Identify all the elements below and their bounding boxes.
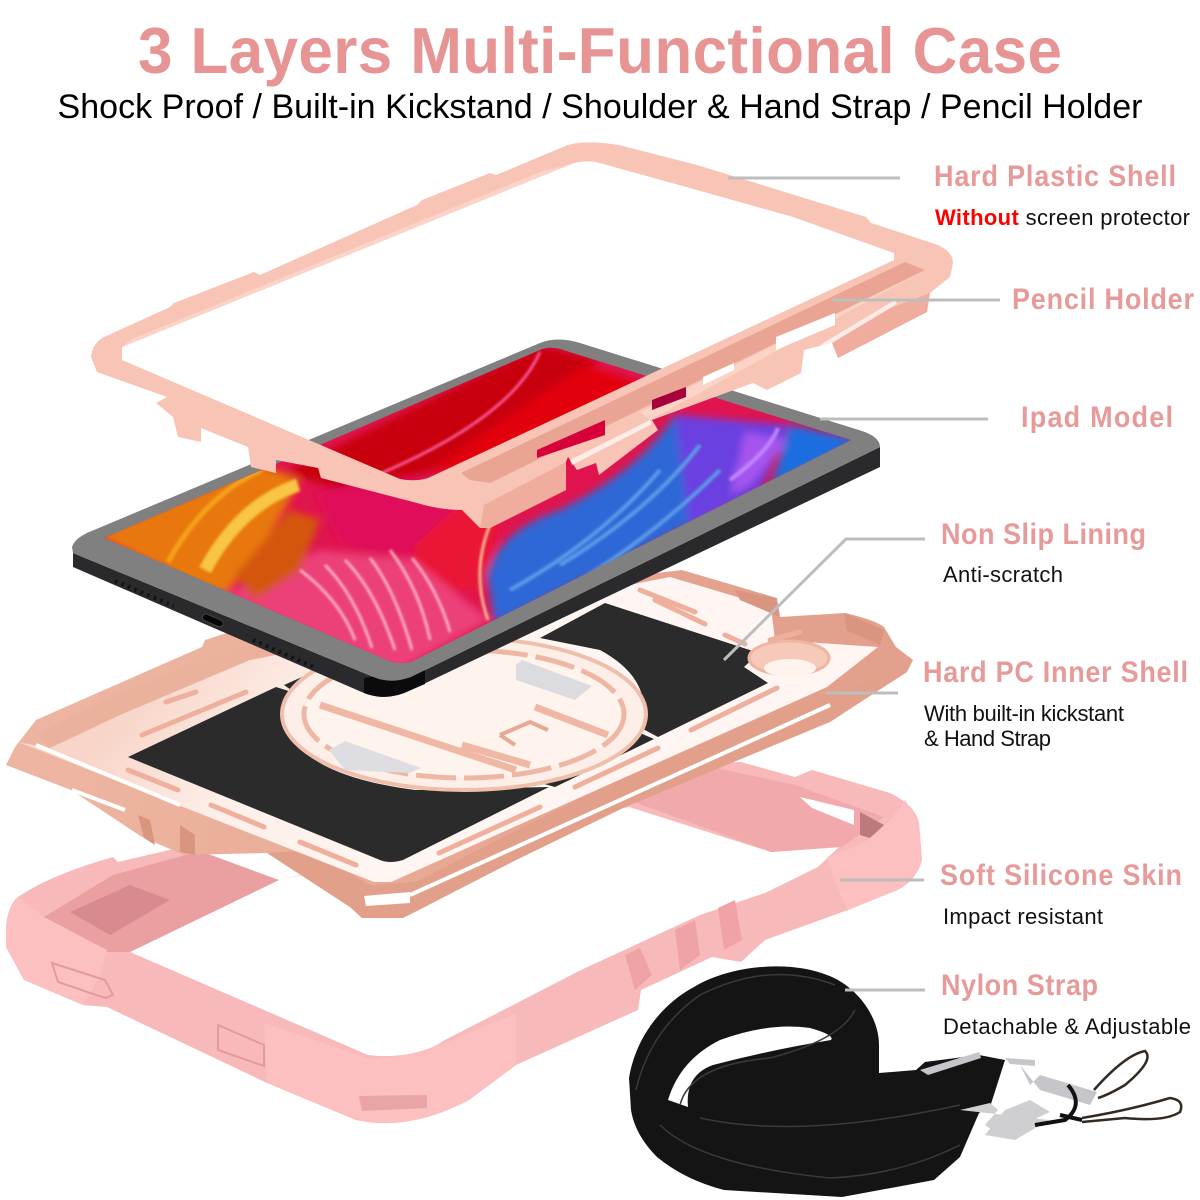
tablet screen	[90, 340, 870, 670]
silicone inner walls	[44, 851, 279, 952]
silicone port covers	[52, 963, 264, 1066]
label: hard pc inner shell: With built-in kickstant	[924, 701, 1124, 726]
metal clip 1	[920, 1052, 1097, 1105]
hard PC inner shell	[6, 570, 913, 918]
title: 3 Layers Multi-Functional Case	[138, 15, 1062, 87]
string loop 1	[1094, 1051, 1148, 1098]
label: non slip lining: Non Slip Lining	[941, 518, 1146, 550]
kickstand hinge	[500, 722, 548, 745]
hand strap clips	[516, 660, 592, 700]
black non slip lining	[128, 603, 768, 862]
subtitle: Shock Proof / Built-in Kickstand / Shoulder & Hand Strap / Pencil Holder	[58, 88, 1142, 126]
pencil holder slot	[461, 262, 925, 483]
frame gaps	[703, 313, 835, 385]
hard plastic shell frame with pencil holder	[91, 142, 953, 528]
frame clip highlights	[570, 300, 897, 465]
label: hard pc inner shell: & Hand Strap	[924, 726, 1051, 751]
label: hard plastic shell	[728, 160, 1190, 230]
label: pencil holder: Pencil Holder	[1012, 283, 1194, 315]
soft silicone skin layer	[6, 762, 922, 1123]
camera cut-out	[749, 641, 829, 675]
inner shell floor	[18, 577, 878, 882]
label: hard pc inner shell: Hard PC Inner Shell	[923, 656, 1188, 688]
frame side shade	[480, 293, 930, 528]
tablet bezel	[72, 340, 880, 681]
strap opening	[668, 1026, 832, 1107]
label: hard plastic shell: Hard Plastic Shell	[934, 160, 1176, 192]
strap folds	[636, 975, 960, 1178]
silicone corner bumpers	[264, 1013, 516, 1123]
silicone side ribs	[625, 900, 742, 990]
metal clip 2	[960, 1100, 1050, 1140]
label: non slip lining	[724, 518, 1146, 660]
label: nylon strap: Detachable & Adjustable	[943, 1014, 1191, 1039]
shell bottom lanyard slot	[364, 892, 410, 906]
frame shading	[122, 163, 925, 420]
inner shell upper-left wall	[36, 650, 250, 748]
floor slots	[128, 590, 800, 865]
disc cross bar	[320, 705, 608, 770]
label: soft silicone skin: Soft Silicone Skin	[940, 859, 1182, 891]
label: nylon strap: Nylon Strap	[941, 969, 1098, 1001]
string loop 2	[1082, 1098, 1181, 1122]
tablet model	[72, 340, 880, 697]
disc inner ring	[304, 650, 624, 778]
black rubber ties	[1035, 1085, 1082, 1125]
label: nylon strap	[845, 969, 1191, 1039]
tablet speakers and port	[115, 581, 316, 668]
label: non slip lining: Anti-scratch	[943, 562, 1063, 587]
label: ipad model: Ipad Model	[1021, 401, 1173, 433]
rotating kickstand disc	[282, 638, 646, 790]
nylon strap	[629, 966, 1181, 1197]
shell side clips	[138, 590, 884, 855]
label: hard plastic shell: Without screen protector	[935, 205, 1190, 230]
label: soft silicone skin: Impact resistant	[943, 904, 1103, 929]
shell rim white gaps	[36, 705, 830, 895]
tablet USB-C port	[201, 613, 224, 628]
label: hard pc inner shell	[826, 656, 1188, 751]
frame gap showing screen	[537, 420, 605, 458]
shell lens hole highlight	[764, 659, 816, 677]
frame gap dark	[652, 387, 686, 410]
label: soft silicone skin	[840, 859, 1182, 929]
